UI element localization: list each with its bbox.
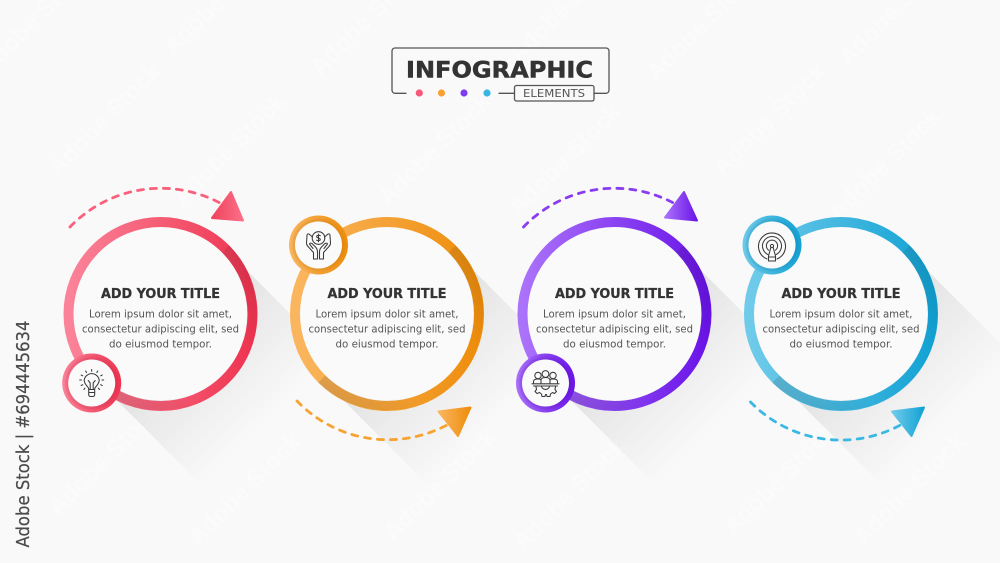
stock credit: Adobe Stock | #694445634 (13, 320, 34, 548)
watermark pattern: Adobe Stock (718, 418, 842, 541)
dashed arrow (524, 188, 697, 227)
card text: Lorem ipsum dolor sit amet, (770, 308, 912, 321)
card text: consectetur adipiscing elit, sed (308, 323, 466, 336)
watermark pattern: Adobe Stock (183, 428, 307, 551)
watermark pattern: Adobe Stock (508, 433, 632, 556)
card text: Lorem ipsum dolor sit amet, (89, 308, 232, 321)
card text: consectetur adipiscing elit, sed (536, 323, 693, 336)
watermark pattern: Adobe Stock (378, 423, 502, 546)
card title: ADD YOUR TITLE (101, 286, 220, 302)
card text (308, 308, 466, 351)
ring shading (549, 249, 706, 405)
card text: consectetur adipiscing elit, sed (82, 323, 239, 336)
watermark pattern: Adobe Stock (168, 88, 292, 211)
card text (82, 308, 239, 351)
long shadow (322, 249, 560, 487)
icon badge: money hands (289, 216, 348, 274)
card text: do eiusmod tempor. (109, 338, 212, 351)
card text: Lorem ipsum dolor sit amet, (316, 308, 458, 321)
card title: ADD YOUR TITLE (782, 286, 900, 302)
heading frame (392, 48, 609, 93)
icon badge: light bulb (62, 354, 121, 412)
circle panel (522, 222, 706, 406)
long shadow (96, 249, 334, 487)
card text: Lorem ipsum dolor sit amet, (543, 308, 686, 321)
ring shading (776, 249, 932, 405)
icon badge: team and gear (516, 354, 575, 412)
card text (536, 308, 693, 351)
colored dots (416, 89, 491, 97)
heading: infographic elements (392, 48, 609, 101)
watermark pattern: Adobe Stock (823, 103, 947, 226)
dashed arrow (297, 401, 470, 440)
circle panel (749, 222, 933, 406)
circle panel (68, 222, 252, 406)
card text: do eiusmod tempor. (563, 338, 666, 351)
step 1: red (62, 188, 333, 487)
circle panel (295, 222, 479, 406)
card text: consectetur adipiscing elit, sed (762, 323, 920, 336)
icon badge: antenna signal (742, 216, 802, 274)
elements label (514, 86, 594, 101)
card text: do eiusmod tempor. (790, 338, 892, 351)
card text: do eiusmod tempor. (336, 338, 438, 351)
ring shading (95, 249, 252, 405)
step 2: orange (289, 216, 560, 487)
card title: ADD YOUR TITLE (328, 286, 446, 302)
card title: ADD YOUR TITLE (555, 286, 674, 302)
long shadow (776, 249, 1000, 487)
watermark pattern: Adobe Stock (373, 88, 497, 211)
card text (762, 308, 920, 351)
step 4: blue (742, 216, 1000, 487)
watermark pattern: Adobe Stock (503, 98, 627, 221)
watermark pattern: Adobe Stock (43, 398, 167, 521)
ring shading (322, 249, 478, 405)
step 3: purple (516, 188, 788, 487)
long shadow (550, 249, 788, 487)
heading text: INFOGRAPHIC (406, 57, 593, 83)
dashed arrow (750, 402, 924, 440)
elements label: ELEMENTS (523, 88, 585, 100)
watermark pattern: Adobe Stock (43, 58, 167, 181)
watermark pattern: Adobe Stock (708, 58, 832, 181)
watermark pattern: Adobe Stock (848, 428, 972, 551)
dashed arrow (70, 188, 243, 227)
